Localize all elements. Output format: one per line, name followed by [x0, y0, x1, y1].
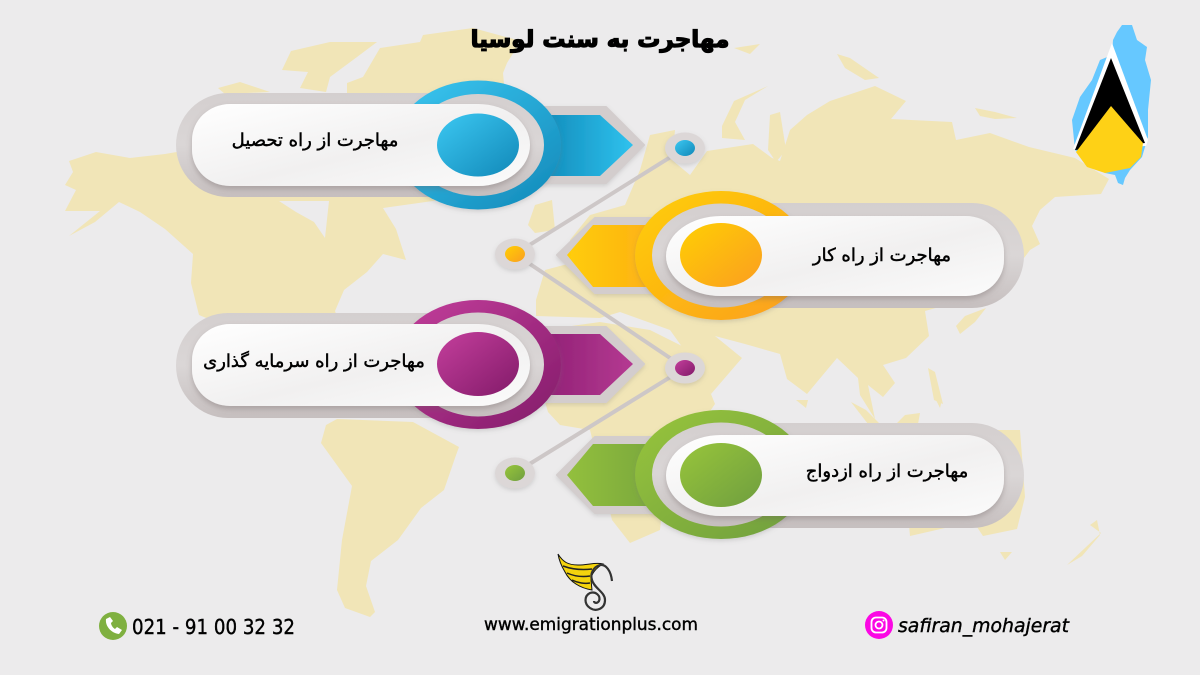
icon: Saint Lucia flag map — [1072, 25, 1151, 185]
arrow: blue hexagon — [540, 107, 644, 183]
blue ring — [395, 80, 561, 210]
icon: logo wing and S — [558, 554, 612, 610]
grey pill base — [176, 93, 478, 197]
inner grey ring — [412, 94, 544, 196]
arrow: green hexagon — [557, 437, 700, 513]
white pill — [192, 104, 530, 186]
white pill — [666, 435, 1004, 516]
inner grey ring — [652, 422, 790, 526]
arrow: yellow hexagon — [557, 218, 700, 293]
green circle — [680, 443, 762, 507]
white pill — [666, 216, 1004, 296]
blue circle — [437, 114, 519, 176]
arrow: purple hexagon — [540, 327, 644, 402]
green ring — [635, 410, 807, 539]
panel: work route — [557, 191, 1024, 320]
inner grey ring — [652, 204, 790, 308]
purple circle — [437, 332, 519, 396]
yellow circle — [680, 223, 762, 287]
grey pill base — [721, 203, 1024, 308]
connector dot: yellow — [495, 238, 535, 270]
title: مهاجرت به سنت لوسیا — [471, 27, 729, 53]
panel: marriage route — [557, 410, 1024, 539]
background world map — [65, 28, 1109, 617]
connector dot: blue — [665, 132, 705, 164]
yellow ring — [635, 191, 807, 320]
label: مهاجرت از راه تحصیل — [232, 130, 398, 151]
connector lines between dots — [515, 148, 685, 473]
panel: study route — [176, 80, 644, 210]
grey pill base — [176, 313, 478, 418]
icon: instagram — [865, 611, 893, 639]
instagram handle: safiran_mohajerat — [898, 615, 1071, 637]
label: مهاجرت از راه کار — [812, 245, 951, 266]
inner grey ring — [412, 312, 544, 416]
grey pill base — [721, 423, 1024, 528]
white pill — [192, 324, 530, 406]
icon: phone — [99, 612, 127, 640]
website: www.emigrationplus.com — [484, 615, 698, 635]
connector dot: purple — [665, 352, 705, 384]
label: مهاجرت از راه ازدواج — [806, 461, 968, 482]
label: مهاجرت از راه سرمایه گذاری — [203, 350, 425, 372]
purple ring — [395, 300, 561, 429]
phone number: 021 - 91 00 32 32 — [132, 615, 295, 639]
connector dot: green — [495, 458, 535, 488]
panel: investment route — [176, 300, 644, 429]
